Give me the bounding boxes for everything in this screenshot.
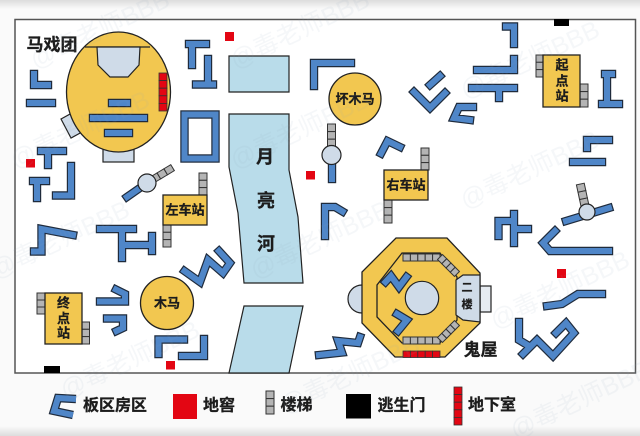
escape door bottom [44, 366, 60, 373]
watermark: @毒老师BBB [456, 126, 604, 214]
legend: 板区房区 [83, 396, 147, 414]
river: moon river: 亮 [257, 190, 275, 211]
panel: haunted house: 楼 [462, 297, 472, 311]
hub with stairs, left [127, 165, 174, 197]
start station: 起 [555, 58, 569, 72]
end station: 终 [57, 296, 70, 310]
end station: 站 [57, 326, 70, 340]
panel: haunted house: 鬼屋 [464, 340, 498, 360]
end station [37, 293, 90, 344]
legend: 逃生门 [377, 396, 426, 414]
watermark: @毒老师BBB [456, 16, 604, 104]
watermark: @毒老师BBB [486, 246, 634, 334]
panel: haunted house: 二 [462, 282, 472, 294]
board-area walls [30, 26, 619, 356]
carousel [140, 276, 194, 330]
left station [163, 173, 207, 247]
legend [54, 387, 516, 425]
legend: 楼梯 [280, 396, 313, 414]
watermark: @毒老师BBB [226, 86, 374, 174]
start station [536, 55, 588, 107]
panel: haunted house [348, 238, 498, 360]
watermark: @毒老师BBB [6, 86, 154, 174]
legend: 地下室 [468, 395, 516, 414]
panel: circus [26, 32, 170, 162]
left station: 左车站 [165, 202, 205, 218]
river: moon river: 月 [256, 147, 274, 167]
start station: 站 [555, 88, 569, 104]
cellar markers [26, 32, 566, 370]
river: moon river [229, 56, 303, 373]
carousel: 木马 [154, 296, 180, 310]
panel: circus: 马戏团 [26, 36, 78, 54]
escape door top [554, 19, 569, 26]
hub with stairs, centre [322, 124, 341, 179]
watermark: @毒老师BBB [276, 331, 424, 419]
end station: 点 [57, 311, 70, 326]
broken carousel [329, 73, 381, 125]
map frame [15, 20, 636, 373]
river: moon river: 河 [257, 234, 275, 254]
right station: 右车站 [386, 178, 426, 192]
watermark: @毒老师BBB [246, 196, 394, 284]
watermark: @毒老师BBB [56, 316, 204, 404]
hub with stairs, right [566, 183, 609, 221]
start station: 点 [555, 74, 569, 88]
broken carousel: 坏木马 [335, 92, 375, 106]
legend: 地窖 [203, 396, 235, 414]
right station [384, 148, 429, 223]
